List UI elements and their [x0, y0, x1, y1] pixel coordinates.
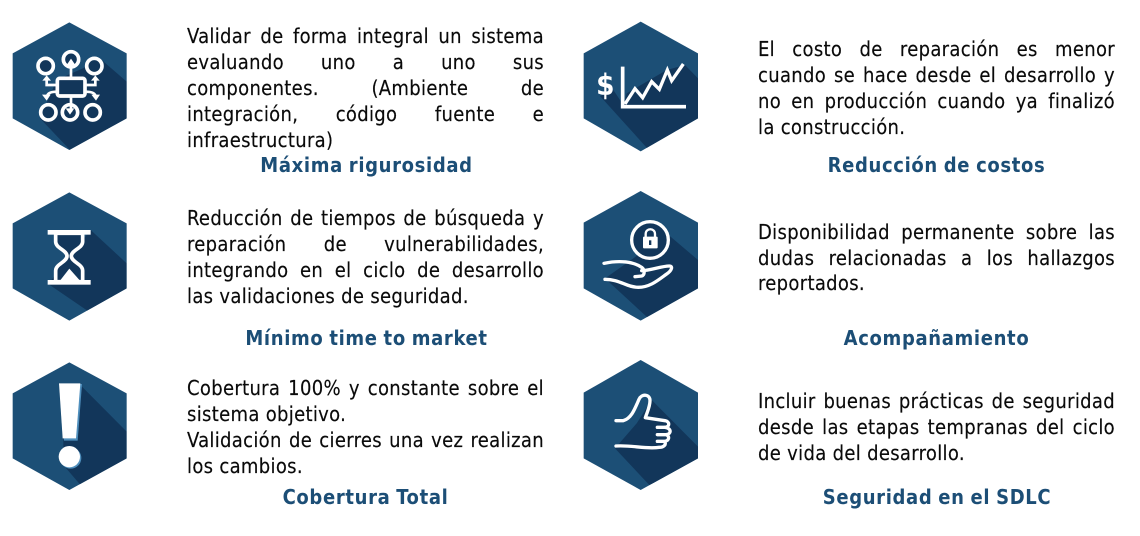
heading: Acompañamiento: Acompañamiento: [844, 326, 1029, 350]
text: disponibilidad permanente: Disponibilidad permanente sobre las: [758, 220, 1115, 244]
icon: hexagon exclamation mark: [12, 362, 127, 490]
text: incluir buenas prácticas: [758, 389, 1115, 465]
text: disponibilidad permanente: reportados.: [758, 271, 865, 295]
icon: hexagon hand with lock: [584, 191, 698, 321]
text: disponibilidad permanente: dudas relacionadas a los hallazgos: [758, 246, 1115, 270]
text: reducción de tiempos: reparación de vulnerabilidades,: [187, 232, 544, 256]
text: incluir buenas prácticas: Incluir buenas prácticas de seguridad: [758, 389, 1115, 413]
text: validar de forma integral: infraestructura): [187, 128, 333, 152]
heading: Máxima rigurosidad: Máxima rigurosidad: [260, 153, 473, 177]
text: incluir buenas prácticas: desde las etapas tempranas del ciclo: [758, 415, 1115, 439]
text: costo de reparación: cuando se hace desde el desarrollo y: [758, 63, 1115, 87]
heading: Cobertura Total: Cobertura Total: [283, 485, 448, 509]
text: costo de reparación: la construcción.: [758, 115, 905, 139]
heading: Reducción de costos: Reducción de costos: [828, 153, 1045, 177]
icon: hexagon cost chart: $: [596, 68, 615, 102]
text: reducción de tiempos: integrando en el ciclo de desarrollo: [187, 258, 544, 282]
text: cobertura 100%: [187, 376, 544, 478]
text: cobertura 100%: Validación de cierres una vez realizan: [187, 428, 544, 452]
text: cobertura 100%: Cobertura 100% y constante sobre el: [187, 376, 544, 400]
text: cobertura 100%: los cambios.: [187, 454, 303, 478]
heading: Seguridad en el SDLC: Seguridad en el SDLC: [823, 485, 1051, 509]
text: validar de forma integral: integración, código fuente e: [187, 102, 544, 126]
icon: hexagon cost chart: [584, 22, 698, 152]
text: incluir buenas prácticas: de vida del desarrollo.: [758, 441, 965, 465]
icon: hexagon hourglass: [12, 192, 127, 321]
text: costo de reparación: El costo de reparación es menor: [758, 37, 1115, 61]
text: reducción de tiempos: las validaciones de seguridad.: [187, 284, 469, 308]
text: disponibilidad permanente: [758, 220, 1115, 295]
text: validar de forma integral: Validar de forma integral un sistema: [187, 24, 544, 48]
text: costo de reparación: [758, 37, 1115, 139]
text: reducción de tiempos: [187, 206, 544, 308]
text: reducción de tiempos: Reducción de tiempos de búsqueda y: [187, 206, 544, 230]
icon: hexagon thumbs up: [584, 360, 698, 490]
text: validar de forma integral: evaluando uno a uno sus: [187, 50, 544, 74]
text: validar de forma integral: componentes. (Ambiente de: [187, 76, 544, 100]
text: costo de reparación: no en producción cuando ya finalizó: [758, 89, 1115, 113]
text: cobertura 100%: sistema objetivo.: [187, 402, 346, 426]
heading: Mínimo time to market: Mínimo time to market: [245, 326, 488, 350]
icon: hexagon network diagram: [12, 22, 127, 150]
text: validar de forma integral: [187, 24, 544, 152]
